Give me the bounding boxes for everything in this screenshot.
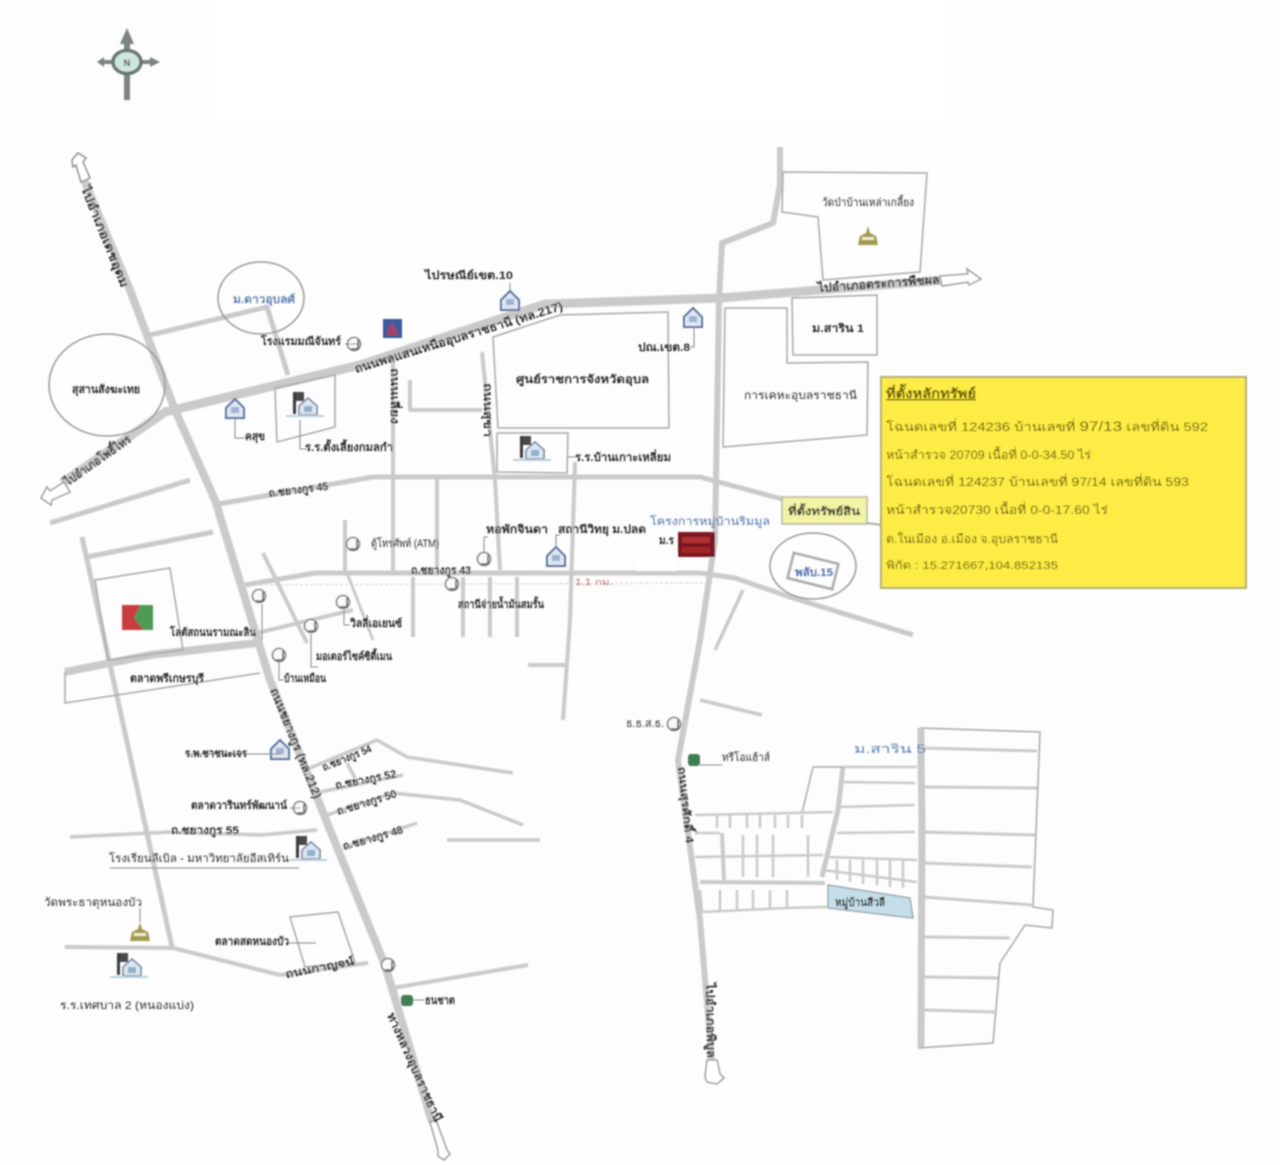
white patch near property bbox=[637, 553, 677, 571]
blue park block bbox=[828, 885, 913, 918]
address line: ต.ในเมือง อ.เมือง จ.อุบลราชธานี bbox=[886, 532, 1058, 547]
label: south market: ตลาดสดหนองบัว bbox=[215, 935, 289, 948]
parcel: temple bbox=[782, 172, 927, 280]
parcel: municipality bbox=[723, 308, 868, 447]
subdivision outline bbox=[918, 728, 1053, 1048]
icon: bilingual school bbox=[289, 836, 327, 860]
label: bank plot: พลับ.15 bbox=[795, 566, 833, 579]
circle: bank plot bbox=[770, 533, 856, 599]
icon: school centre bbox=[513, 436, 551, 460]
label: dormitory: มอเตอร์ไซค์ซิตี้เมน bbox=[316, 648, 392, 663]
label: market: ตลาดพรีเกษรบุรี bbox=[130, 672, 204, 686]
label: site project in blue: โครงการหมู่บ้านริมมูล bbox=[650, 514, 770, 528]
road label: Chayangkun: ถนนชยางกูร (ทล.212) bbox=[266, 686, 324, 801]
label: Sarin 1: ม.สาริน 1 bbox=[812, 322, 864, 335]
road label: soi 45: ถ.ชยางกูร 45 bbox=[268, 481, 329, 501]
label: Dao Ubon village: ม.ดาวอุบลศ์ bbox=[233, 293, 296, 307]
main road: Chayangkun north-south bbox=[82, 175, 432, 1122]
label: west school: ร.ร.ตั้งเลี้ยงกมลกำ bbox=[305, 439, 393, 454]
subdivision streets bbox=[923, 748, 1037, 1012]
eastern vertical road bbox=[678, 147, 780, 1062]
label: municipal school: ร.ร.เทศบาล 2 (หนองแบ่ง) bbox=[60, 1000, 194, 1012]
icon: bank south bbox=[382, 958, 394, 972]
survey line 2: หน้าสำรวจ20730 เนื้อที่ 0-0-17.60 ไร่ bbox=[886, 501, 1109, 517]
label: park: หมู่บ้านสีวลี bbox=[835, 896, 885, 910]
panel background bbox=[881, 377, 1246, 588]
road end arrows bbox=[41, 153, 981, 1160]
icon: clinic bbox=[226, 399, 244, 418]
callout: property tag bbox=[782, 497, 882, 525]
label: post office: ปณ.เขต.8 bbox=[638, 341, 690, 354]
distance line bbox=[250, 583, 712, 585]
icon: green bank bbox=[401, 995, 413, 1006]
survey line 1: หน้าสำรวจ 20709 เนื้อที่ 0-0-34.50 ไร่ bbox=[886, 446, 1092, 462]
road label: south road: ถนนกาญจน์ bbox=[284, 955, 356, 981]
road label: soi 48: ถ.ชยางกูร 48 bbox=[342, 824, 405, 854]
icon: water station bbox=[446, 578, 458, 590]
road label: soi 55: ถ.ชยางกูร 55 bbox=[171, 825, 239, 838]
icon: fuel spot A bbox=[252, 590, 266, 602]
label: provincial hall: ศูนย์ราชการจังหวัดอุบล bbox=[516, 373, 649, 387]
label: gas station A: วิลลี่เอเยนซ์ bbox=[349, 615, 402, 630]
label: municipality: การเคหะอุบลราชธานี bbox=[744, 389, 858, 402]
icon: fuel spot B bbox=[336, 596, 350, 608]
arrow: south east road bbox=[705, 1060, 724, 1084]
deed line 2: โฉนดเลขที่ 124237 บ้านเลขที่ 97/14 เลขที่ดิน 593 bbox=[886, 473, 1189, 489]
road name labels bbox=[59, 181, 940, 1125]
subdivision main road bbox=[921, 728, 922, 1047]
road label: soi 50: ถ.ชยางกูร 50 bbox=[335, 788, 398, 819]
property marker: red building bbox=[678, 532, 715, 557]
icons: government offices and schools bbox=[110, 226, 878, 1006]
label: water station: สถานีจ่ายน้ำมันสมรั้น bbox=[458, 596, 544, 611]
label: market spot: ตลาดวารินทร์พัฒนาน์ bbox=[191, 799, 287, 812]
road label: south arm of east road: ไปอำเภอพิบูล bbox=[702, 981, 719, 1058]
icon: municipal school bbox=[110, 953, 148, 977]
label: site marker abbreviation: ม.ร bbox=[659, 535, 674, 547]
label: market road shop: บ้านเหมือน bbox=[284, 672, 326, 685]
label: large hospital: สถานีวิทยุ ม.ปลด bbox=[558, 523, 646, 537]
arrow: east bbox=[940, 269, 981, 286]
label: bank east: ธ.ธ.ส.ธ. bbox=[626, 718, 664, 730]
road label: soi 393: ถนนเลี่ยง bbox=[388, 368, 403, 424]
icon: house at market road bbox=[271, 740, 289, 759]
label: school west block: โลตัสถนนรามณะลิน bbox=[169, 625, 256, 639]
parcel: school compound bbox=[497, 433, 568, 473]
circle: Dao Ubon village bbox=[218, 262, 304, 334]
label: bilingual school: โรงเรียนลีเบิล - มหาวิทยาลัยอีสเทิร์น bbox=[109, 851, 289, 865]
subdivision plan bbox=[695, 728, 1053, 1048]
red and green landmark square bbox=[122, 605, 153, 630]
label: green shop: ทรีโอแฮ้าส์ bbox=[722, 750, 770, 764]
arrow: west bbox=[41, 482, 70, 505]
icon: fuel spot C bbox=[304, 620, 318, 632]
icon: temple south-west bbox=[130, 922, 150, 941]
road label: Surasak: ถนนสุรศักดิ์ 4 bbox=[674, 766, 698, 845]
leader lines bbox=[110, 283, 722, 1000]
coordinates line: พิกัด : 15.271667,104.852135 bbox=[886, 560, 1058, 572]
road label: soi 52: ถ.ชยางกูร 52 bbox=[334, 768, 398, 793]
compass rose: N bbox=[124, 58, 130, 68]
property tag text: ที่ตั้งทรัพย์สิน bbox=[788, 503, 861, 518]
label: centre school: ร.ร.บ้านเกาะเหลี่ยม bbox=[575, 449, 671, 464]
land parcels bbox=[49, 172, 927, 967]
icon: market spot bbox=[294, 802, 306, 814]
road label: west arm: ไปอำเภอโพธิ์ไทร bbox=[59, 430, 134, 489]
icon: hotel bbox=[348, 338, 360, 350]
road label: soi 43: ถ.ชยางกูร 43 bbox=[411, 565, 471, 578]
deed line 1: โฉนดเลขที่ 124236 บ้านเลขที่ 97/13 เลขที่ดิน 592 bbox=[886, 418, 1208, 434]
road network bbox=[50, 147, 945, 1122]
icon: shop bbox=[478, 552, 490, 566]
road label: highway 217: ถนนพลแสนเหนืออุบลราชธานี (ทล.217) bbox=[353, 299, 565, 377]
blue square marker bbox=[383, 319, 402, 338]
secondary streets bbox=[50, 480, 190, 523]
arrow: south main bbox=[430, 1120, 450, 1160]
icon: large hospital bbox=[547, 547, 565, 566]
label: clinic: คสุข bbox=[245, 431, 265, 444]
parcel: west block bbox=[95, 568, 183, 660]
label: police station: ไปรษณีย์เขต.10 bbox=[423, 268, 513, 282]
rectangle in circle bbox=[788, 553, 838, 589]
label: house on market road: ร.พ.ชาชนะเจร bbox=[185, 748, 247, 760]
icon: green shop bbox=[688, 754, 700, 766]
label: south-west temple: วัดพระธาตุหนองบัว bbox=[44, 897, 142, 909]
road label: soi 487: ถนนสุขา bbox=[480, 383, 493, 437]
compass rose bbox=[97, 28, 160, 100]
label: phone shop: ตู้โทรศัพท์ (ATM) bbox=[371, 536, 439, 550]
connector to panel bbox=[867, 523, 882, 525]
label: cemetery: สุสานสังฆะเทย bbox=[72, 383, 140, 397]
parcel: south market bbox=[290, 912, 355, 967]
label: Sarin 5 blue: ม.สาริน 5 bbox=[854, 742, 926, 756]
parcel: provincial hall bbox=[493, 312, 669, 428]
icon: school west bbox=[286, 392, 324, 416]
icon: temple north bbox=[858, 226, 878, 245]
road label: north arm of main road: ไปอำเภอเดชอุดม bbox=[76, 181, 133, 290]
label: green bank: ธนชาต bbox=[425, 995, 455, 1007]
property tag box bbox=[782, 497, 867, 524]
place labels bbox=[44, 194, 926, 1012]
road label: south arm of main road: ทางหลวงอุบลราชธานี bbox=[383, 1011, 445, 1125]
parcel: Sarin 1 bbox=[792, 295, 877, 355]
label: temple: วัดป่าบ้านเหล่าเกลี้ยง bbox=[822, 194, 914, 209]
label: site distance: 1.1 กม. bbox=[575, 577, 613, 587]
icon: phone shop bbox=[346, 538, 360, 550]
road label: east arm: ไปอำเภอตระการพืชผล bbox=[815, 272, 940, 295]
circle: cemetery bbox=[49, 334, 165, 436]
icon: fuel spot D bbox=[272, 648, 286, 662]
icon: police station bbox=[501, 291, 519, 310]
icon: post office east bbox=[684, 308, 702, 327]
highway 217 east-west bbox=[62, 280, 945, 483]
road label: soi 54: ถ.ชยางกูร 54 bbox=[321, 743, 374, 775]
parcel: market bbox=[65, 672, 260, 703]
label: hotel: โรงแรมมณีจันทร์ bbox=[260, 334, 341, 348]
icon: bank east bbox=[668, 718, 680, 730]
parcel: school west bbox=[275, 375, 335, 442]
panel: property details bbox=[881, 377, 1246, 588]
label: shop: หอพักจินดา bbox=[486, 523, 548, 536]
arrow: north bbox=[72, 153, 90, 182]
panel heading: ที่ตั้งหลักทรัพย์ bbox=[886, 383, 976, 401]
white erased patch at top bbox=[210, 0, 946, 120]
